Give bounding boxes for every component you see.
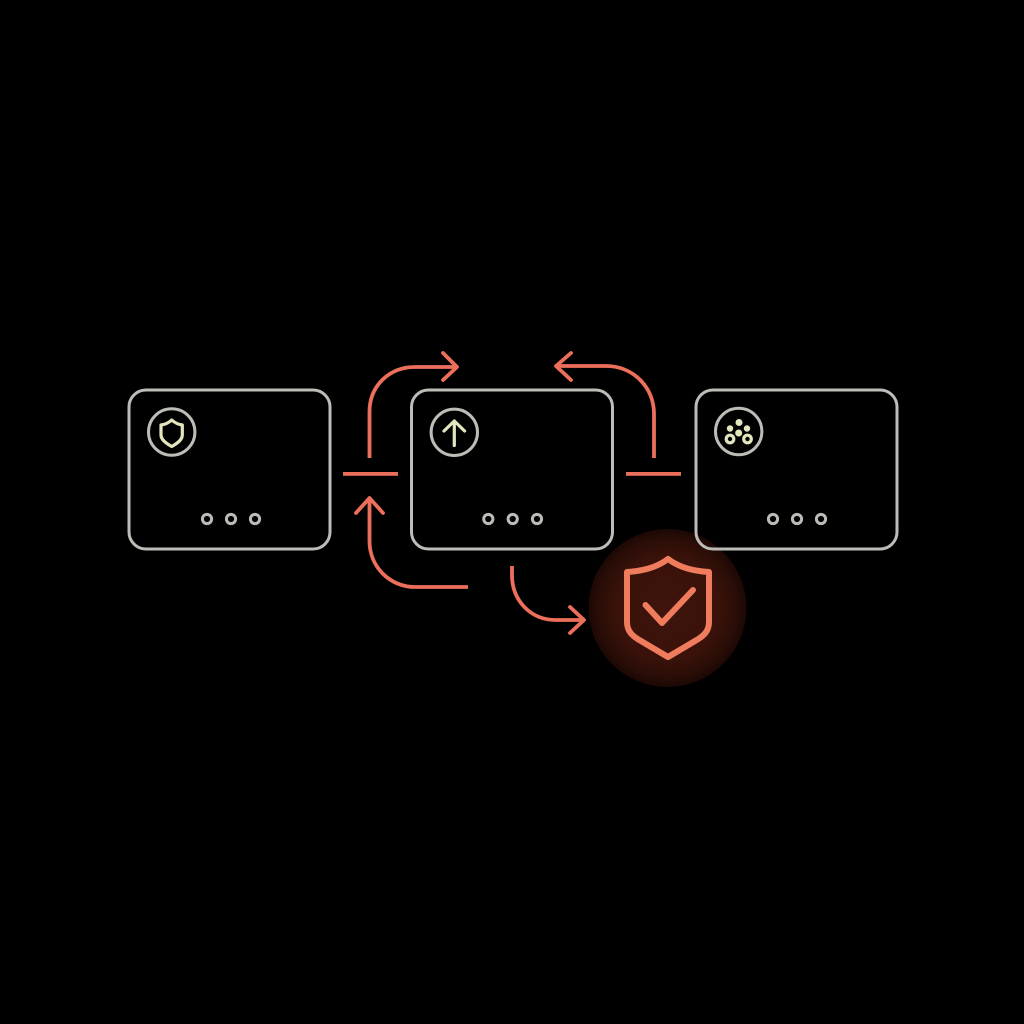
panel: card 2 — [412, 390, 612, 549]
icon: up arrow in circle — [431, 409, 477, 455]
dots: card 2 — [484, 514, 542, 524]
connector: right bar — [626, 472, 681, 476]
icon: shield in circle — [148, 409, 195, 455]
arrow: card 2 back up to card 1 — [356, 498, 468, 587]
connector: left bar — [343, 472, 398, 476]
dots: card 1 — [202, 514, 260, 524]
icon: shield with check — [627, 559, 709, 657]
panel: card 1 — [129, 390, 330, 549]
panel: card 3 — [696, 390, 897, 549]
arrow: card 2 to shield badge — [512, 566, 584, 633]
dots: card 3 — [768, 514, 826, 524]
arrow: card 1 over to card 2 — [370, 353, 457, 458]
icon: dots cluster in circle — [716, 408, 762, 455]
arrow: card 3 over to card 2 — [556, 353, 654, 458]
glow circle behind cards — [588, 529, 746, 687]
